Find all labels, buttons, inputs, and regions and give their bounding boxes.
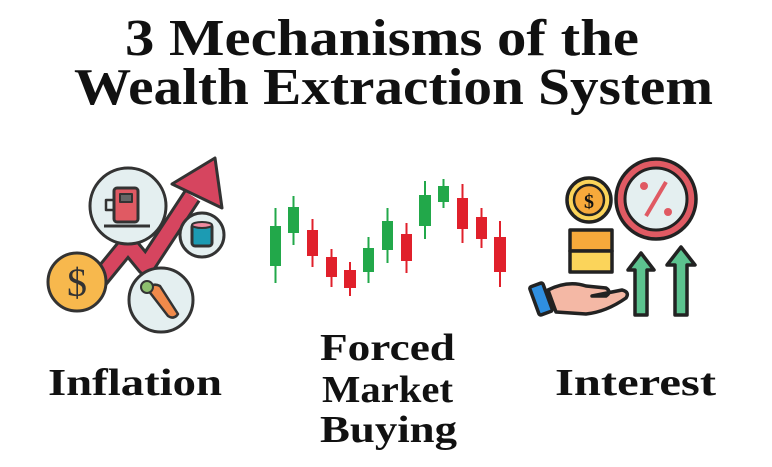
icon: carrot circle	[129, 268, 193, 332]
icon: dollar coin: $	[67, 260, 87, 305]
icon: up arrows	[628, 247, 695, 315]
icon: percent circle	[616, 159, 696, 239]
icon: gas pump circle	[90, 168, 166, 244]
arrow: rising zigzag	[97, 158, 222, 282]
icon: can circle	[180, 213, 224, 257]
label: Interest: Interest	[555, 362, 716, 404]
label: Forced Market Buying: Buying	[320, 409, 457, 451]
icon: hand	[529, 283, 627, 315]
icon: coin stack: $	[584, 191, 594, 213]
label: Forced Market Buying: Market	[322, 369, 453, 411]
icon: inflation	[48, 158, 224, 332]
label: Forced Market Buying	[320, 327, 457, 451]
icon: coin stack	[567, 178, 612, 272]
icon: interest	[529, 159, 696, 315]
title	[74, 10, 713, 116]
title: Wealth Extraction System	[74, 59, 713, 116]
icon: dollar coin	[48, 253, 106, 311]
title: 3 Mechanisms of the	[125, 10, 639, 67]
label: Forced Market Buying: Forced	[320, 327, 455, 369]
chart: candlesticks	[270, 179, 506, 296]
label: Inflation: Inflation	[48, 362, 222, 404]
